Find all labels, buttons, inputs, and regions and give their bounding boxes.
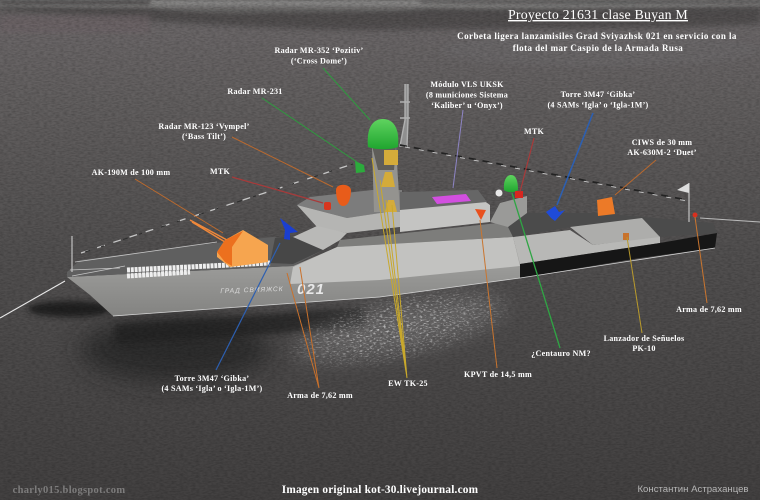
leader: MR-123 <box>232 137 333 187</box>
aft ensign <box>677 183 689 193</box>
credit: original image: Imagen original kot-30.livejournal.com <box>282 484 479 496</box>
label: MTK forward: MTK <box>210 167 230 176</box>
equipment: MR-123 radar orange <box>336 185 351 206</box>
leader: EW TK-25 <box>372 158 407 378</box>
hull forward grey section <box>67 237 520 316</box>
leader: MTK aft <box>520 138 534 192</box>
hull aft black section <box>520 233 717 278</box>
label: Arma 7,62 lower: Arma de 7,62 mm <box>287 391 353 400</box>
label: Torre 3M47 upper: (4 SAMs ‘Igla’ o ‘Igla-1M’) <box>547 100 649 110</box>
mast <box>400 84 410 146</box>
equipment: white dome <box>496 190 502 196</box>
label: Radar MR-123: (‘Bass Tilt’) <box>182 132 226 141</box>
side deck band <box>337 222 513 247</box>
equipment: MTK red aft <box>515 191 523 198</box>
bridge wing deck <box>297 190 402 218</box>
equipment: yellow EW boxes <box>381 150 398 212</box>
leader: VLS <box>453 110 463 188</box>
label: Lanzador PK-10: PK-10 <box>632 344 656 353</box>
equipment: UKSK VLS pink <box>432 194 471 204</box>
equipment: Gibka forward blue <box>280 218 298 240</box>
label: VLS UKSK: Módulo VLS UKSK <box>430 80 504 89</box>
equipment: small green dome <box>504 175 518 192</box>
equipment: PK-10 <box>623 233 629 240</box>
credit: photographer: Константин Астраханцев <box>637 484 749 495</box>
equipment: MR-231 small green <box>355 161 365 173</box>
subtitle: flota del mar Caspio de la Armada Rusa <box>513 43 683 53</box>
label: AK-190M: AK-190M de 100 mm <box>92 168 170 177</box>
hull name: ГРАД СВИЯЖСК <box>220 286 284 295</box>
equipment: AK-190M gun <box>190 220 268 267</box>
label: Lanzador PK-10: Lanzador de Señuelos <box>604 334 684 343</box>
leader lines <box>135 68 707 388</box>
label: Torre 3M47 lower: Torre 3M47 ‘Gibka’ <box>175 374 249 383</box>
equipment: green radar dome MR-352 <box>368 119 398 149</box>
label: Radar MR-352: Radar MR-352 ‘Pozitiv’ <box>275 46 363 55</box>
label: Arma 7,62 right: Arma de 7,62 mm <box>676 305 742 314</box>
label: Radar MR-231: Radar MR-231 <box>227 87 283 96</box>
crew on deck <box>127 263 270 276</box>
label: Radar MR-352: (‘Cross Dome’) <box>291 56 347 66</box>
forward light panel <box>293 226 347 250</box>
equipment: MTK red forward <box>324 202 331 210</box>
mast tower <box>372 146 400 212</box>
subtitle: Corbeta ligera lanzamisiles Grad Sviyazhsk 021 en servicio con la <box>457 31 737 41</box>
midship block <box>400 192 490 232</box>
mooring lines <box>0 218 760 318</box>
label: Centauro: ¿Centauro NM? <box>531 349 591 358</box>
waterline <box>113 248 715 316</box>
equipment: KPVT red-orange <box>475 209 486 220</box>
leader: MTK forward <box>232 177 323 203</box>
foredeck dark well <box>270 237 323 264</box>
label: VLS UKSK: ‘Kaliber’ u ‘Onyx’) <box>431 101 503 110</box>
leader: MR-352 <box>323 68 370 120</box>
leader: Gibka lower <box>216 243 280 370</box>
label: CIWS: CIWS de 30 mm <box>632 138 692 147</box>
leader: 7.62 right <box>695 217 707 303</box>
hull aft grey section <box>513 230 660 264</box>
label: EW TK-25: EW TK-25 <box>388 379 428 388</box>
leader: Centauro <box>512 193 560 348</box>
leader: 7.62 lower <box>287 267 319 388</box>
bow jackstaff and aft flagstaff <box>72 183 689 272</box>
label: MTK aft: MTK <box>524 127 544 136</box>
subtitle <box>457 31 737 53</box>
label: VLS UKSK: (8 municiones Sistema <box>426 90 508 100</box>
foredeck <box>67 237 323 277</box>
leader: Gibka upper <box>557 113 593 205</box>
label: Torre 3M47 lower: (4 SAMs ‘Igla’ o ‘Igla-1M’) <box>161 384 263 393</box>
label: Torre 3M47 upper: Torre 3M47 ‘Gibka’ <box>561 90 635 99</box>
aft deck <box>508 213 717 237</box>
credit: blog watermark: charly015.blogspot.com <box>13 485 125 496</box>
flag lines <box>81 145 687 253</box>
label: KPVT: KPVT de 14,5 mm <box>464 370 532 379</box>
equipment: Gibka aft blue <box>546 206 565 221</box>
hull number: 021 <box>297 281 325 298</box>
hull upper light side <box>290 237 520 284</box>
leader: PK-10 <box>627 237 642 333</box>
leader: KPVT <box>480 220 497 368</box>
ship: corvette Grad Sviyazhsk <box>67 84 717 316</box>
equipment: aft gun red <box>692 212 698 218</box>
label: Radar MR-123: Radar MR-123 ‘Vympel’ <box>158 122 250 131</box>
label: CIWS: AK-630M-2 ‘Duet’ <box>627 148 697 157</box>
equipment: CIWS orange <box>597 197 615 216</box>
leader: CIWS <box>615 160 656 195</box>
leader: MR-231 <box>262 98 357 162</box>
leader: AK-190M <box>135 179 223 233</box>
title: Proyecto 21631 clase Buyan M <box>508 8 688 23</box>
